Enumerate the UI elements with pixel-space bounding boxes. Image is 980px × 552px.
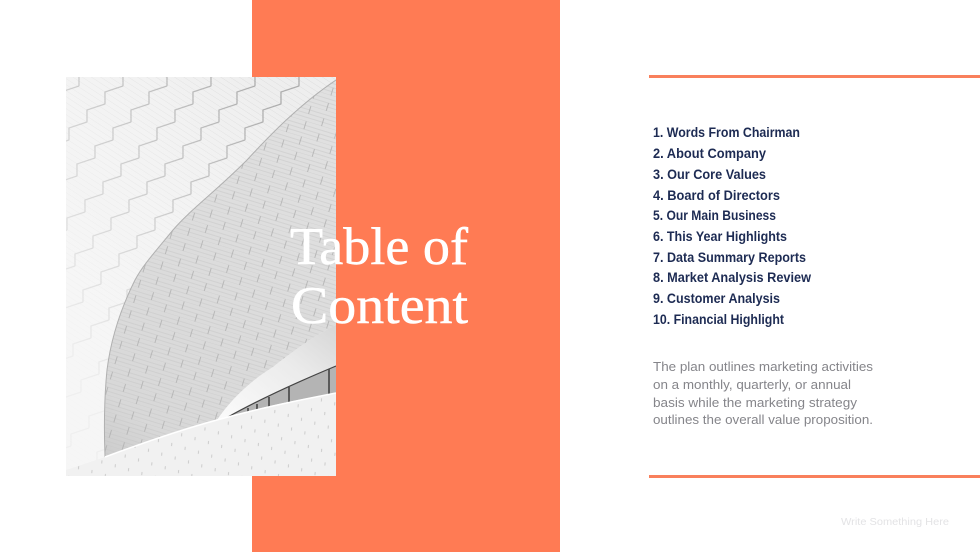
table of contents list: 7. Data Summary Reports (653, 250, 806, 265)
table of contents list: 4. Board of Directors (653, 188, 780, 203)
title (290, 218, 468, 335)
table of contents list: 8. Market Analysis Review (653, 270, 811, 285)
panel: orange column (252, 0, 560, 552)
table of contents list: 9. Customer Analysis (653, 291, 780, 306)
table of contents list: 5. Our Main Business (653, 208, 776, 223)
bottom divider (649, 475, 980, 478)
table of contents list: 1. Words From Chairman (653, 125, 800, 140)
body paragraph: The plan outlines marketing activities (653, 359, 874, 374)
footer note: Write Something Here (841, 516, 949, 528)
title: Content (291, 277, 468, 335)
top divider (649, 75, 980, 78)
table of contents list: 6. This Year Highlights (653, 229, 787, 244)
table of contents list (653, 125, 811, 327)
body paragraph (653, 359, 874, 427)
title: Table of (290, 218, 468, 276)
body paragraph: on a monthly, quarterly, or annual (653, 377, 851, 392)
table of contents list: 2. About Company (653, 146, 766, 161)
table of contents list: 10. Financial Highlight (653, 312, 784, 327)
photo: white brick architecture (66, 77, 336, 476)
body paragraph: outlines the overall value proposition. (653, 412, 873, 427)
body paragraph: basis while the marketing strategy (653, 395, 858, 410)
table of contents list: 3. Our Core Values (653, 167, 766, 182)
